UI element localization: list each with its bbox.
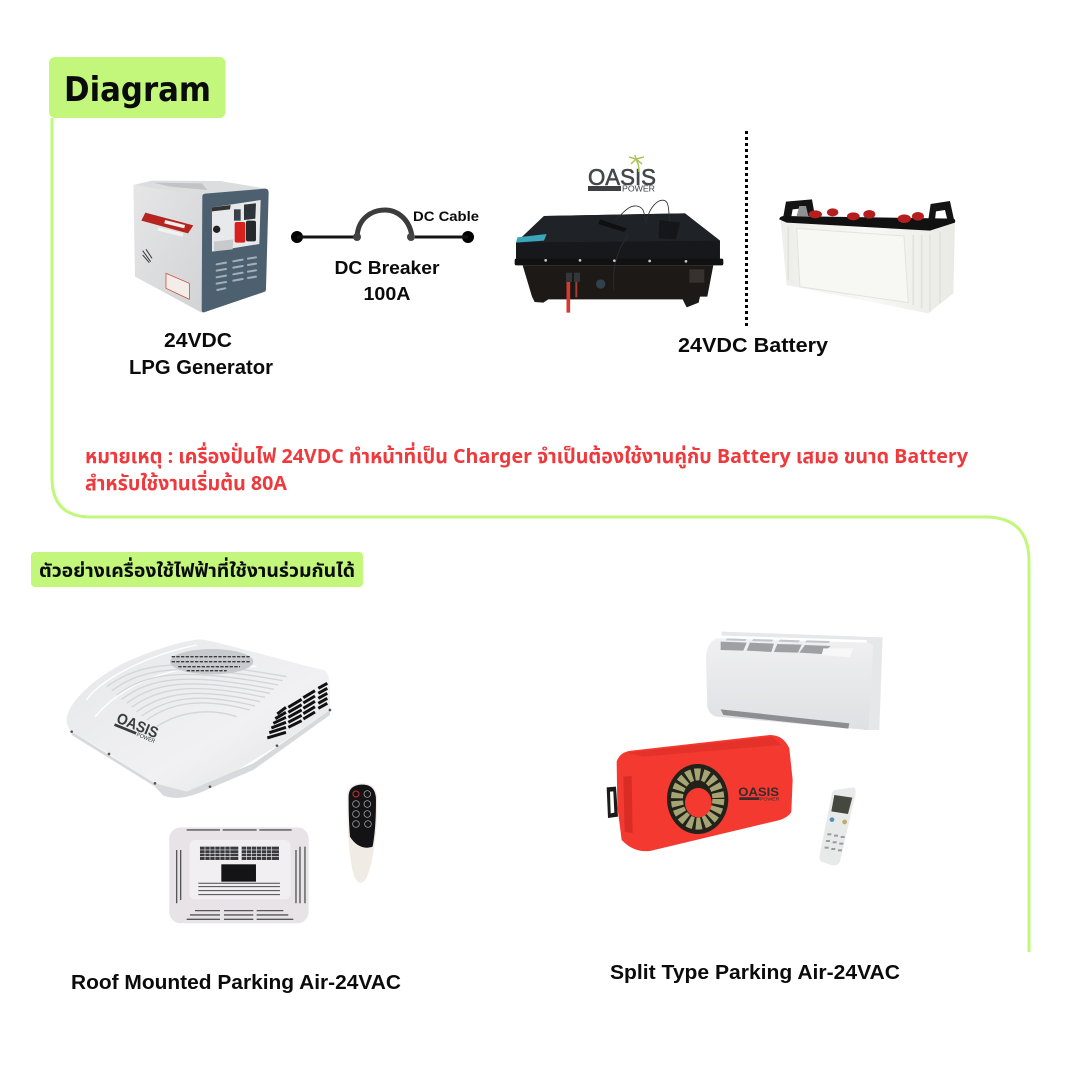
label: 24VDC LPG Generator: 24VDC xyxy=(164,330,232,352)
logo: Oasis Power xyxy=(588,155,656,194)
label: Split Type Parking Air-24VAC: Split Type Parking Air-24VAC xyxy=(610,962,900,984)
icon: lithium battery xyxy=(515,200,723,313)
label: 24VDC LPG Generator: LPG Generator xyxy=(129,357,273,379)
label: DC Cable: DC Cable xyxy=(413,209,480,224)
icon: split wall unit xyxy=(706,632,883,730)
icon: red outdoor unit xyxy=(607,735,793,851)
dotted divider xyxy=(745,131,748,326)
note: red Thai text: หมายเหตุ : เครื่องปั่นไฟ 24VDC ทำหน้าที่เป็น Charger จำเป็นต้องใช้งานคู่กับ Battery เสมอ ขนาด Battery xyxy=(85,442,969,472)
green connector outline xyxy=(52,118,1029,952)
icon: split unit remote xyxy=(819,787,856,865)
label: DC Breaker 100A: 100A xyxy=(364,284,411,304)
icon: LPG generator xyxy=(133,181,269,313)
icon: roof mounted air conditioner xyxy=(67,639,331,798)
label: 24VDC Battery: 24VDC Battery xyxy=(678,335,829,357)
logo: Oasis Power: POWER xyxy=(622,184,655,194)
label: Roof Mounted Parking Air-24VAC: Roof Mounted Parking Air-24VAC xyxy=(71,972,401,994)
icon: roof unit remote xyxy=(347,783,377,883)
arrow: DC cable with breaker xyxy=(291,210,474,243)
icon: red outdoor unit: POWER xyxy=(760,796,780,801)
icon: roof mounted air conditioner: POWER xyxy=(135,732,156,745)
icon: lead-acid battery xyxy=(779,199,955,313)
icon: red outdoor unit: OASIS xyxy=(738,785,779,799)
note: red Thai text: สำหรับใช้งานเริ่มต้น 80A xyxy=(85,469,287,499)
label: DC Breaker 100A: DC Breaker xyxy=(334,258,440,278)
heading: Diagram: Diagram xyxy=(64,70,211,110)
icon: ceiling indoor unit xyxy=(169,827,309,923)
heading: Diagram xyxy=(49,57,226,118)
icon: roof mounted air conditioner: OASIS xyxy=(114,710,161,742)
logo: Oasis Power: OASIS xyxy=(588,164,656,190)
heading: compatible appliances: ตัวอย่างเครื่องใช้ไฟฟ้าที่ใช้งานร่วมกันได้ xyxy=(39,557,355,586)
